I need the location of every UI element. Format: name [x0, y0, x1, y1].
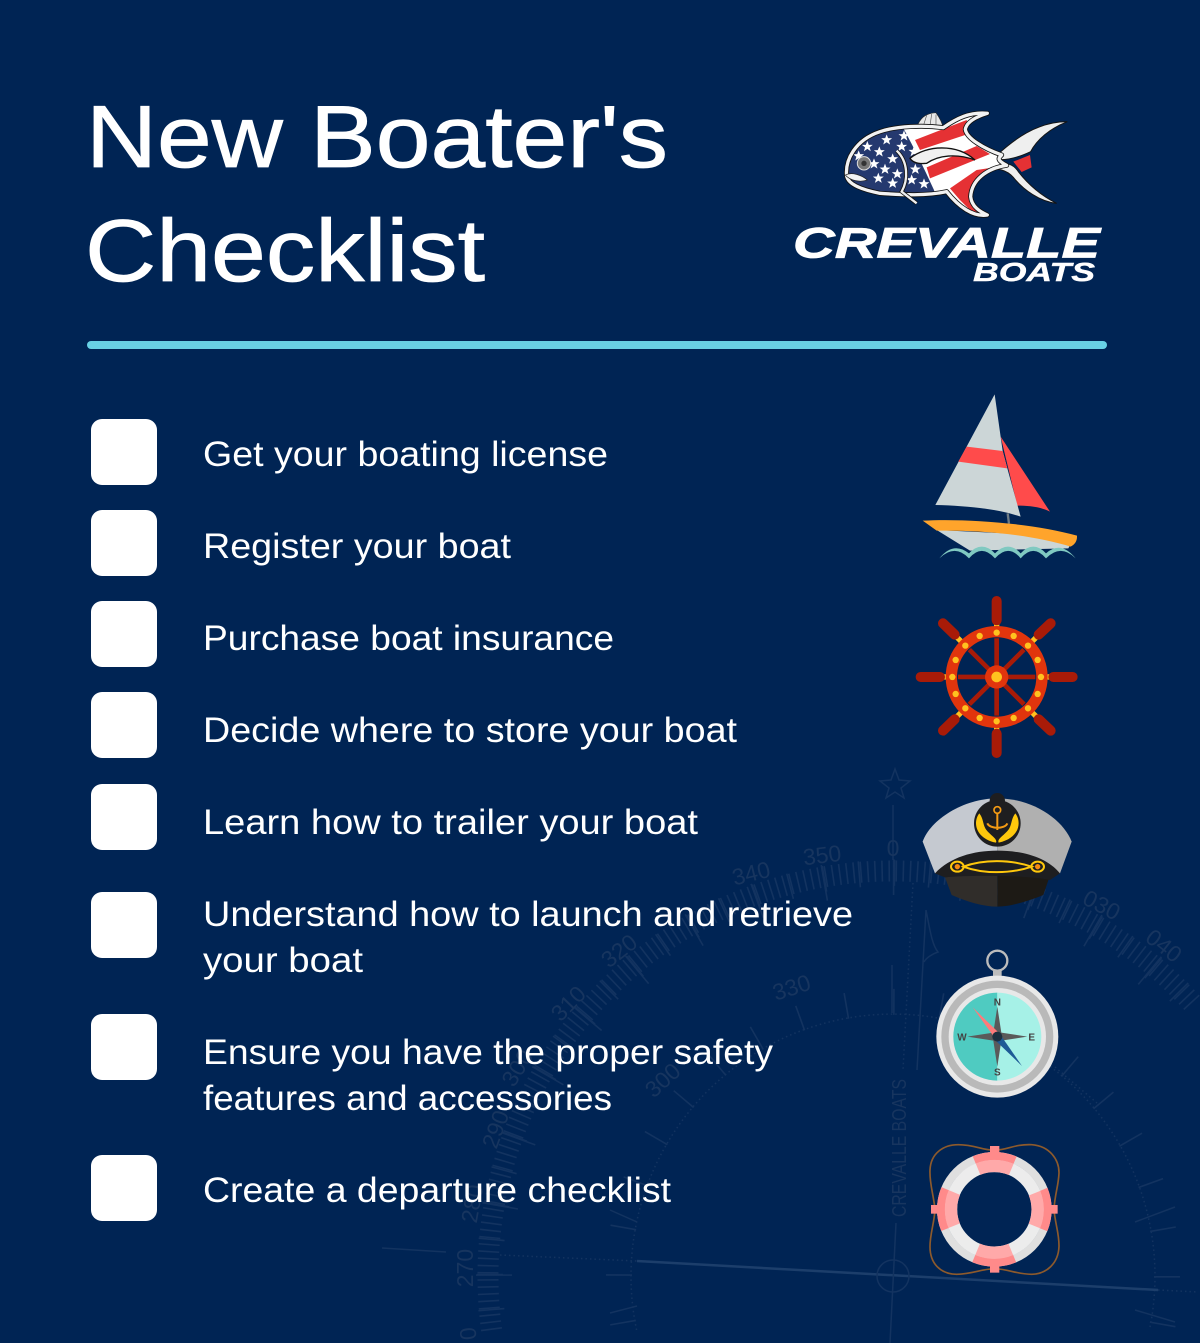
icon: compass: [936, 951, 1058, 1098]
icon: sailboat: [923, 394, 1077, 558]
icon: captain hat: [923, 793, 1072, 907]
compass degree labels: 030: [1079, 884, 1125, 925]
item 5: [91, 784, 698, 850]
divider: [87, 341, 1107, 349]
compass degree labels: 300: [640, 1058, 686, 1103]
compass degree labels: 340: [729, 856, 773, 890]
item 1: Get your boating license: [203, 435, 608, 474]
compass rose background: [382, 769, 1198, 1343]
item 5: Learn how to trailer your boat: [203, 803, 698, 842]
item 3: [91, 601, 614, 667]
compass degree labels: 300: [496, 1045, 538, 1091]
icon: compass: E: [1028, 1032, 1035, 1043]
item 4: [91, 692, 737, 758]
icon: life ring: [930, 1145, 1059, 1274]
compass degree labels: 350: [801, 840, 843, 870]
title: [85, 87, 668, 300]
item 2: Register your boat: [203, 527, 511, 566]
icon: compass: W: [957, 1032, 967, 1043]
compass degree labels: 310: [546, 981, 591, 1026]
item 8: Create a departure checklist: [203, 1171, 671, 1210]
item 4: Decide where to store your boat: [203, 711, 737, 750]
item 2: [91, 510, 511, 576]
compass degree labels: 0: [887, 835, 899, 861]
item 1: [91, 419, 608, 485]
compass degree labels: CREVALLE BOATS: [889, 1079, 911, 1217]
logo: Crevalle Boats: [793, 110, 1102, 287]
icon: flag fish: [843, 110, 1067, 220]
item 8: [91, 1155, 671, 1221]
wordmark: Boats: BOATS: [973, 257, 1096, 287]
item 7: Ensure you have the proper safety: [203, 1033, 774, 1072]
title: New Boater's: [86, 87, 668, 186]
compass degree labels: 040: [1141, 924, 1187, 968]
item 3: Purchase boat insurance: [203, 619, 614, 658]
compass degree labels: 290: [477, 1107, 514, 1152]
icon: compass: S: [994, 1067, 1001, 1078]
compass degree labels: 270: [452, 1249, 478, 1287]
compass degree labels: 330: [769, 969, 814, 1006]
icon: compass: N: [994, 997, 1001, 1008]
compass degree labels: [452, 835, 1187, 1341]
item 7: [91, 1014, 774, 1118]
wordmark: Crevalle: CREVALLE: [793, 220, 1102, 268]
item 6: Understand how to launch and retrieve: [203, 895, 853, 934]
icon: ship wheel: [921, 601, 1073, 753]
title: Checklist: [85, 201, 485, 300]
checklist: [91, 419, 853, 1221]
compass degree labels: 320: [596, 929, 642, 973]
compass degree labels: 280: [456, 1182, 488, 1225]
compass degree labels: 0: [455, 1326, 482, 1341]
item 6: your boat: [203, 941, 363, 980]
item 7: features and accessories: [203, 1079, 612, 1118]
item 6: [91, 892, 853, 980]
